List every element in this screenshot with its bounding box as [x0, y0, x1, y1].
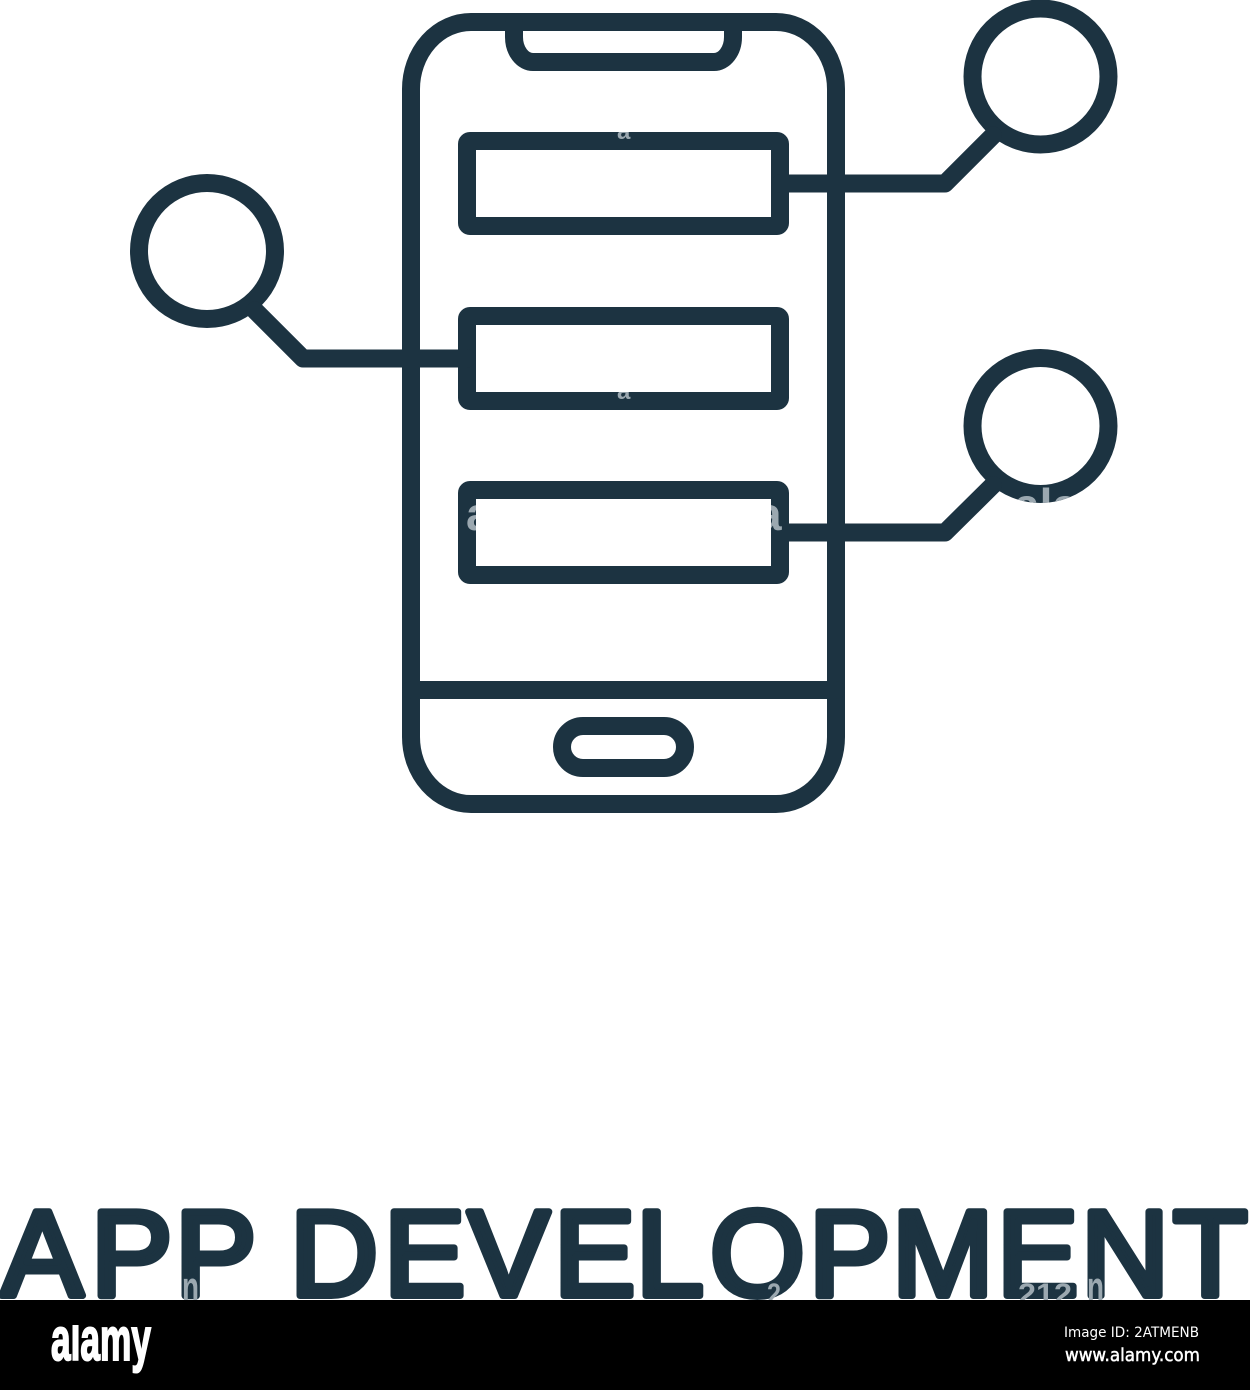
title: APP DEVELOPMENT: [2, 1186, 1248, 1322]
website: www.alamy.com: [1065, 1345, 1200, 1366]
content row 2: [467, 316, 780, 401]
connector: row 3 to lower right circle: [780, 485, 993, 532]
watermark fragments on icon: ala: [1014, 479, 1078, 531]
watermark fragments on icon: [466, 118, 1078, 540]
footer bar: [0, 1300, 1250, 1390]
connector: row 2 to left circle: [255, 310, 467, 358]
icon: phone body: [411, 22, 836, 804]
node: top right circle: [972, 8, 1108, 144]
watermark fragments on icon: a: [466, 488, 492, 540]
watermark fragments on title: [182, 1263, 1104, 1312]
footer logo: alamy: [51, 1306, 151, 1373]
image id: Image ID: 2ATMENB: [1064, 1325, 1199, 1341]
watermark fragments on title: n: [1087, 1263, 1104, 1312]
watermark fragments on title: n: [182, 1263, 199, 1312]
icon: home button: [562, 726, 685, 768]
watermark fragments on title: 212: [1018, 1278, 1072, 1311]
watermark fragments on icon: a: [617, 378, 631, 405]
watermark fragments on icon: a: [756, 488, 782, 540]
content row 1: [467, 141, 780, 226]
icon: phone notch: [514, 22, 733, 62]
node: lower right circle: [972, 358, 1108, 494]
node: left circle: [139, 183, 275, 319]
connector: row 1 to top right circle: [780, 136, 993, 184]
icon: smartphone with linked nodes: [139, 8, 1108, 804]
content row 3: [467, 490, 780, 575]
watermark fragments on icon: a: [617, 118, 631, 145]
watermark fragments on title: 2: [767, 1278, 781, 1311]
phone bottom bar: [411, 681, 836, 699]
